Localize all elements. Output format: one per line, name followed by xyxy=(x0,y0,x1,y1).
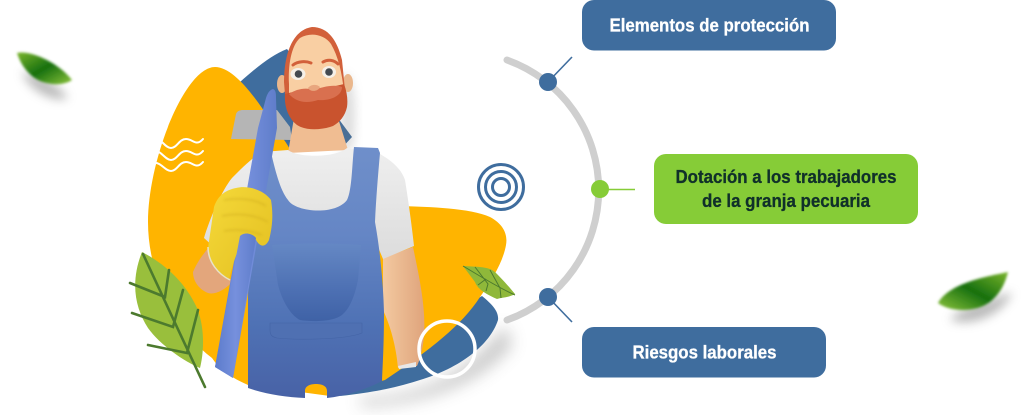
connector: middle xyxy=(591,180,635,198)
hoe blade xyxy=(231,110,292,140)
pole over glove xyxy=(215,234,256,378)
head xyxy=(277,27,353,129)
box: Dotación a los trabajadores xyxy=(654,154,918,224)
t-shirt xyxy=(204,148,414,259)
overalls xyxy=(248,147,384,398)
connector: bottom xyxy=(539,288,572,322)
background blob: blue xyxy=(240,49,498,396)
large green leaf xyxy=(130,252,205,387)
hair xyxy=(284,27,345,95)
beard and moustache xyxy=(285,84,347,129)
connector: top xyxy=(539,57,572,91)
background blob: yellow xyxy=(148,67,506,396)
glove xyxy=(208,187,272,280)
eyes xyxy=(290,68,306,80)
overall strap band xyxy=(270,323,362,339)
right arm xyxy=(383,247,424,368)
watch cuff xyxy=(398,362,416,369)
pole xyxy=(215,89,277,378)
head shadow xyxy=(340,75,355,150)
ears xyxy=(277,75,287,93)
box: Riesgos laborales xyxy=(582,327,826,378)
face xyxy=(289,35,344,100)
floating leaf: left xyxy=(17,53,72,99)
pocket xyxy=(272,244,361,321)
floating leaf: right xyxy=(938,272,1012,322)
box: Dotación a los trabajadores: Dotación a los trabajadores xyxy=(676,167,896,187)
box: Elementos de protección xyxy=(582,0,836,50)
concentric circles icon xyxy=(478,164,524,210)
box: Riesgos laborales: Riesgos laborales xyxy=(632,342,776,362)
neck xyxy=(288,118,348,153)
worker character xyxy=(193,27,424,398)
box: Elementos de protección: Elementos de protección xyxy=(610,16,810,36)
decorative waves xyxy=(154,139,203,171)
small green leaf xyxy=(463,266,515,299)
white ring xyxy=(419,321,475,377)
left arm xyxy=(193,246,232,293)
nose xyxy=(308,85,320,91)
eyebrows xyxy=(293,60,338,65)
box: Dotación a los trabajadores: de la granja pecuaria xyxy=(702,191,871,211)
background blob shadow xyxy=(360,325,512,406)
timeline arc xyxy=(507,60,599,320)
